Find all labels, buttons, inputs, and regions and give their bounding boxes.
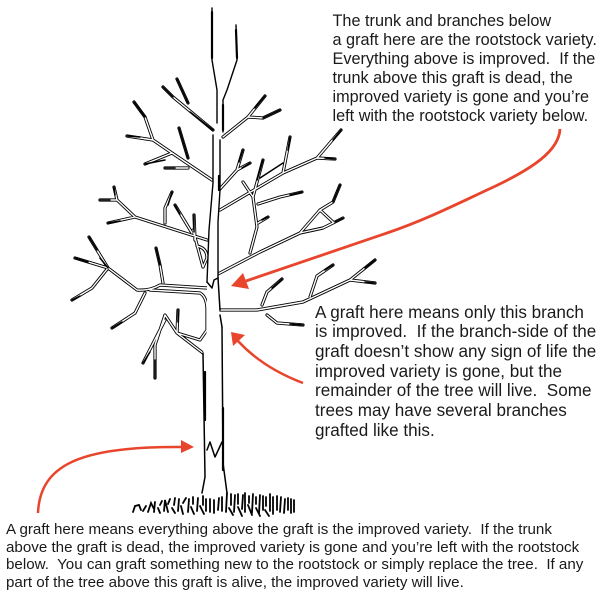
arrow: to branch graft [231, 332, 303, 383]
text: low trunk graft explanation: A graft here means everything above the graft is the improved variety. If the trunk above the graft is dead, the improved variety is gone and you’re left with the rootstock below. You can graft something new to the rootstock or simply replace the tree. If any part of the tree above this graft is alive, the improved variety will live. [6, 521, 583, 591]
text: top graft explanation: The trunk and branches below a graft here are the rootstock variety. Everything above is improved. If the trunk above this graft is dead, the improved variety is gone and you’re left with the rootstock variety below. [332, 12, 597, 125]
text: branch graft explanation: A graft here means only this branch is improved. If the branch-side of the graft doesn’t show any sign of life the improved variety is gone, but the remainder of the tree will live. Some trees may have several branches grafted like this. [315, 302, 596, 440]
branch tips [72, 79, 375, 378]
arrow: to low trunk graft [38, 440, 194, 513]
trunk and leader [202, 8, 237, 493]
trunk fill [202, 135, 227, 493]
arrow: to upper trunk graft [231, 129, 560, 289]
branches [72, 79, 375, 378]
grass [133, 493, 294, 516]
